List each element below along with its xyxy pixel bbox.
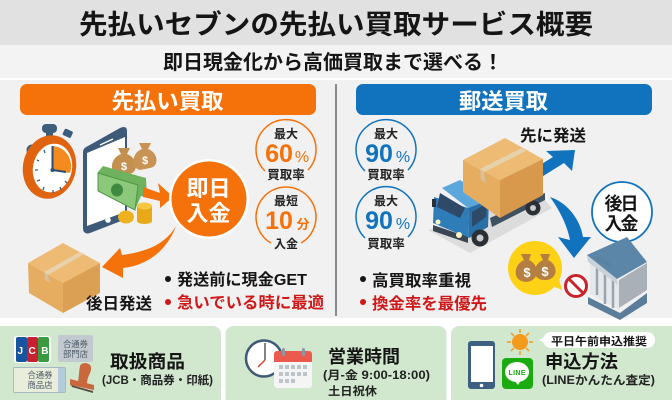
icon: smartphone <box>468 341 495 389</box>
icon: money bubble: $ <box>523 265 531 280</box>
arrow: 先に発送 <box>540 150 575 178</box>
badge: 最大90%買取率 (lower) <box>356 187 416 251</box>
badge: 最大90%買取率 (upper): 最大 <box>374 126 398 141</box>
icon: money bubble <box>508 241 562 295</box>
icon: calendar <box>274 348 312 388</box>
badge: 最大90%買取率 (lower): 買取率 <box>367 236 405 251</box>
badge: 最大60%買取率: % <box>295 149 309 166</box>
icon: clock <box>246 340 282 376</box>
badge: 即日入金: 入金 <box>186 201 230 226</box>
arrow: to instant payment <box>143 183 173 208</box>
icon: JCB logo: JCB <box>18 346 48 357</box>
heading: 先払い買取 <box>20 84 316 115</box>
panel: 申込方法 <box>451 326 672 400</box>
text: 土日祝休: 土日祝休 <box>328 384 378 398</box>
icon: money bags: $ <box>121 161 127 173</box>
badge: 後日入金: 入金 <box>604 214 638 234</box>
badge: 最大90%買取率 (upper): 90 <box>365 140 393 168</box>
icon: LINE <box>502 358 533 389</box>
icon: 合通券部門店 card: 部門店 <box>63 349 88 359</box>
title band <box>0 0 672 45</box>
badge: 最大90%買取率 (upper) <box>356 120 416 182</box>
badge: 最短10分入金: 入金 <box>274 236 298 251</box>
callout: 平日午前申込推奨 <box>539 332 655 348</box>
arrow: to bank <box>550 197 591 258</box>
divider <box>335 84 337 316</box>
icon: smartphone <box>83 127 127 233</box>
bullet: 急いでいる時に最適: 急いでいる時に最適 <box>177 293 324 312</box>
badge: 後日入金 <box>592 182 652 242</box>
label: 先に発送: 先に発送 <box>520 126 586 145</box>
badge: 最大60%買取率: 最大 <box>274 126 298 141</box>
heading: 郵送買取 <box>356 84 652 115</box>
badge: 最短10分入金: 10 <box>265 207 293 235</box>
badge: 即日入金: 即日 <box>186 176 230 201</box>
badge: 最大90%買取率 (lower): % <box>396 216 410 233</box>
panel: 営業時間 <box>226 326 446 400</box>
title band: 先払いセブンの先払い買取サービス概要 <box>79 9 593 40</box>
icon: delivery truck <box>428 180 552 253</box>
icon: 合通券商品店 ticket: 商品店 <box>27 380 53 390</box>
icon: stopwatch <box>17 124 82 204</box>
text: JCB・商品券・印紙: (JCB・商品券・印紙) <box>102 373 213 387</box>
icon: JCB logo <box>14 336 51 363</box>
badge: 最大90%買取率 (lower): 最大 <box>374 193 398 208</box>
badge: 後日入金: 後日 <box>604 194 638 214</box>
arrow: to box <box>102 226 176 278</box>
bullet: 発送前に現金GET: 発送前に現金GET <box>177 270 307 289</box>
subtitle band: 即日現金化から高価買取まで選べる！ <box>163 51 503 74</box>
panel: 先払い買取 <box>17 84 324 313</box>
heading: 取扱商品: 取扱商品 <box>110 352 185 372</box>
icon: bank building: BANK <box>595 256 614 270</box>
main background <box>0 80 672 318</box>
panel: 郵送買取 <box>356 84 652 320</box>
text: hours: (月-金 9:00-18:00) <box>323 368 430 382</box>
icon: 合通券部門店 card <box>58 335 93 362</box>
icon: banknotes <box>98 166 147 210</box>
heading: 先払い買取: 先払い買取 <box>112 89 224 114</box>
heading: 申込方法: 申込方法 <box>545 351 618 372</box>
panel: 取扱商品 <box>0 326 221 400</box>
heading: 郵送買取: 郵送買取 <box>459 89 548 114</box>
icon: cardboard box <box>28 243 100 313</box>
badge: 最大90%買取率 (lower): 90 <box>365 207 393 235</box>
callout: 平日午前申込推奨: 平日午前申込推奨 <box>551 334 647 348</box>
bullet: 換金率を最優先: 換金率を最優先 <box>372 294 487 313</box>
bullet: 高買取率重視: 高買取率重視 <box>372 271 471 290</box>
icon: LINE: LINE <box>508 370 526 377</box>
icon: money bags: $ <box>142 155 148 167</box>
badge: 最大60%買取率 <box>256 120 316 182</box>
text: LINEかんたん査定: (LINEかんたん査定) <box>542 373 655 387</box>
badge: 最大60%買取率: 買取率 <box>267 167 305 182</box>
icon: parcel on truck <box>463 138 543 218</box>
icon: prohibited sign <box>566 276 586 296</box>
icon: coins <box>118 202 152 224</box>
badge: 最短10分入金: 分 <box>296 217 310 232</box>
badge: 最短10分入金: 最短 <box>274 193 298 208</box>
icon: stamp <box>70 363 94 393</box>
icon: money bubble: $ <box>541 264 549 279</box>
badge: 即日入金 <box>169 159 249 239</box>
subtitle band <box>0 45 672 78</box>
heading: 営業時間: 営業時間 <box>328 347 400 367</box>
badge: 最大90%買取率 (upper): 買取率 <box>367 167 405 182</box>
icon: 合通券商品店 ticket <box>14 368 66 392</box>
icon: sun <box>507 329 533 355</box>
icon: bank building <box>587 237 647 320</box>
badge: 最短10分入金 <box>256 187 316 251</box>
label: 後日発送: 後日発送 <box>86 294 152 313</box>
badge: 最大60%買取率: 60 <box>265 140 293 168</box>
icon: money bags <box>112 143 157 174</box>
icon: 合通券部門店 card: 合通券 <box>63 339 89 349</box>
icon: 合通券商品店 ticket: 合通券 <box>27 370 53 380</box>
badge: 最大90%買取率 (upper): % <box>396 149 410 166</box>
